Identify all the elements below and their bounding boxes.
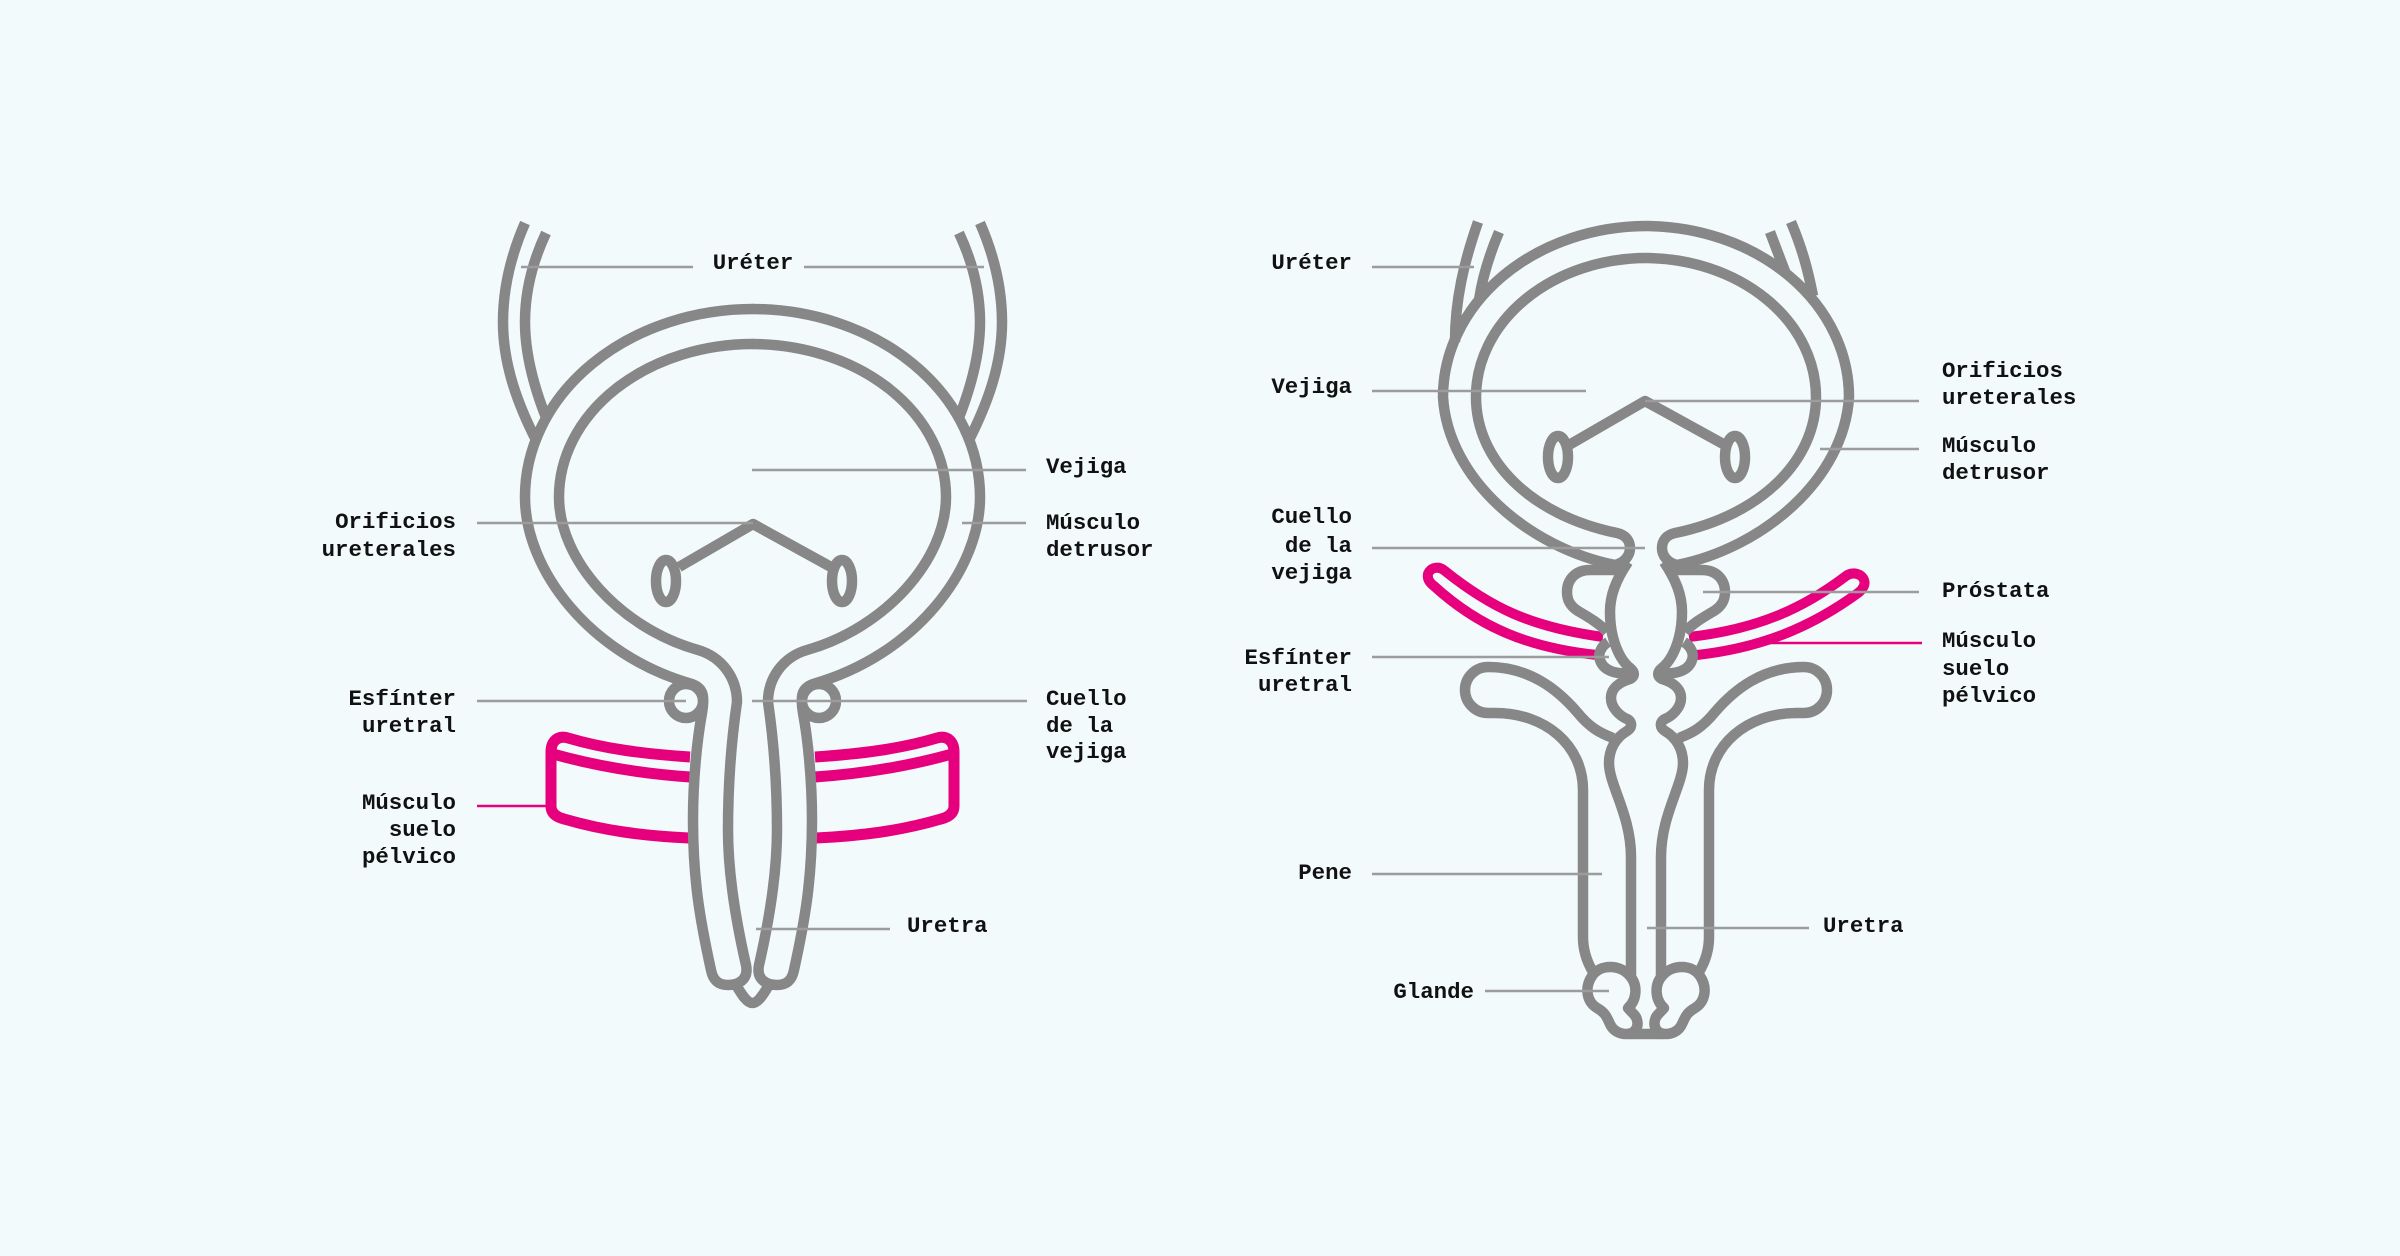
ureters bbox=[1455, 222, 1813, 342]
label: Músculo suelo pélvico: Músculo bbox=[362, 790, 456, 816]
label: Músculo suelo pélvico bbox=[362, 790, 551, 870]
label: Esfínter uretral: uretral bbox=[1258, 672, 1352, 698]
urethra, prostate, sphincter, penis left half bbox=[1465, 562, 1638, 1034]
label: Orificios ureterales: ureterales bbox=[1942, 385, 2076, 411]
label: Músculo detrusor: detrusor bbox=[1942, 460, 2050, 486]
label: Cuello de la vejiga: vejiga bbox=[1046, 739, 1127, 765]
label: Próstata: Próstata bbox=[1942, 578, 2050, 604]
label: Vejiga: Vejiga bbox=[1271, 374, 1352, 400]
label: Músculo suelo pélvico: suelo bbox=[1942, 656, 2009, 682]
bladder and urethra walls bbox=[525, 309, 980, 1003]
urethral sphincter rings bbox=[669, 684, 836, 718]
label: Músculo suelo pélvico: pélvico bbox=[1942, 683, 2036, 709]
label: Músculo detrusor: Músculo bbox=[1046, 510, 1140, 536]
label: Esfínter uretral bbox=[348, 686, 686, 739]
label: Cuello de la vejiga: de la bbox=[1285, 533, 1352, 559]
diagram: female urinary tract bbox=[322, 223, 1154, 1003]
pelvic floor muscle bbox=[551, 737, 954, 838]
label: Esfínter uretral bbox=[1244, 645, 1609, 698]
pelvic floor muscle bbox=[1428, 568, 1865, 655]
label: Músculo suelo pélvico: pélvico bbox=[362, 844, 456, 870]
label: Orificios ureterales bbox=[322, 509, 753, 563]
label: Músculo detrusor bbox=[962, 510, 1154, 563]
urethra, prostate, sphincter, penis right half bbox=[1654, 562, 1827, 1034]
label: Cuello de la vejiga: Cuello bbox=[1271, 504, 1352, 530]
bladder walls bbox=[1443, 226, 1849, 565]
label: Cuello de la vejiga bbox=[752, 686, 1127, 765]
ureteral orifices bbox=[1548, 401, 1745, 478]
label: Uretra: Uretra bbox=[1823, 913, 1904, 939]
label: Orificios ureterales: ureterales bbox=[322, 537, 456, 563]
label: Músculo detrusor: Músculo bbox=[1942, 433, 2036, 459]
label: Músculo suelo pélvico bbox=[1760, 628, 2036, 709]
diagram: male urinary tract bbox=[1244, 222, 2076, 1034]
label: Cuello de la vejiga bbox=[1271, 504, 1645, 586]
label: Uréter: Uréter bbox=[713, 250, 793, 276]
label: Cuello de la vejiga: Cuello bbox=[1046, 686, 1127, 712]
label: Músculo suelo pélvico: suelo bbox=[389, 817, 456, 843]
ureters bbox=[503, 223, 1002, 442]
label: Orificios ureterales bbox=[1645, 358, 2076, 411]
label: Esfínter uretral: Esfínter bbox=[1244, 645, 1352, 671]
label: Cuello de la vejiga: vejiga bbox=[1271, 560, 1352, 586]
label: Esfínter uretral: uretral bbox=[362, 713, 456, 739]
label: Músculo detrusor bbox=[1820, 433, 2050, 486]
label: Uréter: Uréter bbox=[1271, 250, 1352, 276]
label: Músculo detrusor: detrusor bbox=[1046, 537, 1154, 563]
label: Vejiga: Vejiga bbox=[1046, 454, 1127, 480]
label: Pene: Pene bbox=[1298, 860, 1352, 886]
label: Esfínter uretral: Esfínter bbox=[348, 686, 456, 712]
ureteral orifices bbox=[656, 524, 852, 602]
label: Glande: Glande bbox=[1393, 979, 1474, 1005]
label: Orificios ureterales: Orificios bbox=[1942, 358, 2063, 384]
label: Orificios ureterales: Orificios bbox=[335, 509, 456, 535]
label: Cuello de la vejiga: de la bbox=[1046, 713, 1113, 739]
label: Uretra: Uretra bbox=[907, 913, 988, 939]
glans base bar bbox=[1628, 1029, 1664, 1039]
label: Músculo suelo pélvico: Músculo bbox=[1942, 628, 2036, 654]
